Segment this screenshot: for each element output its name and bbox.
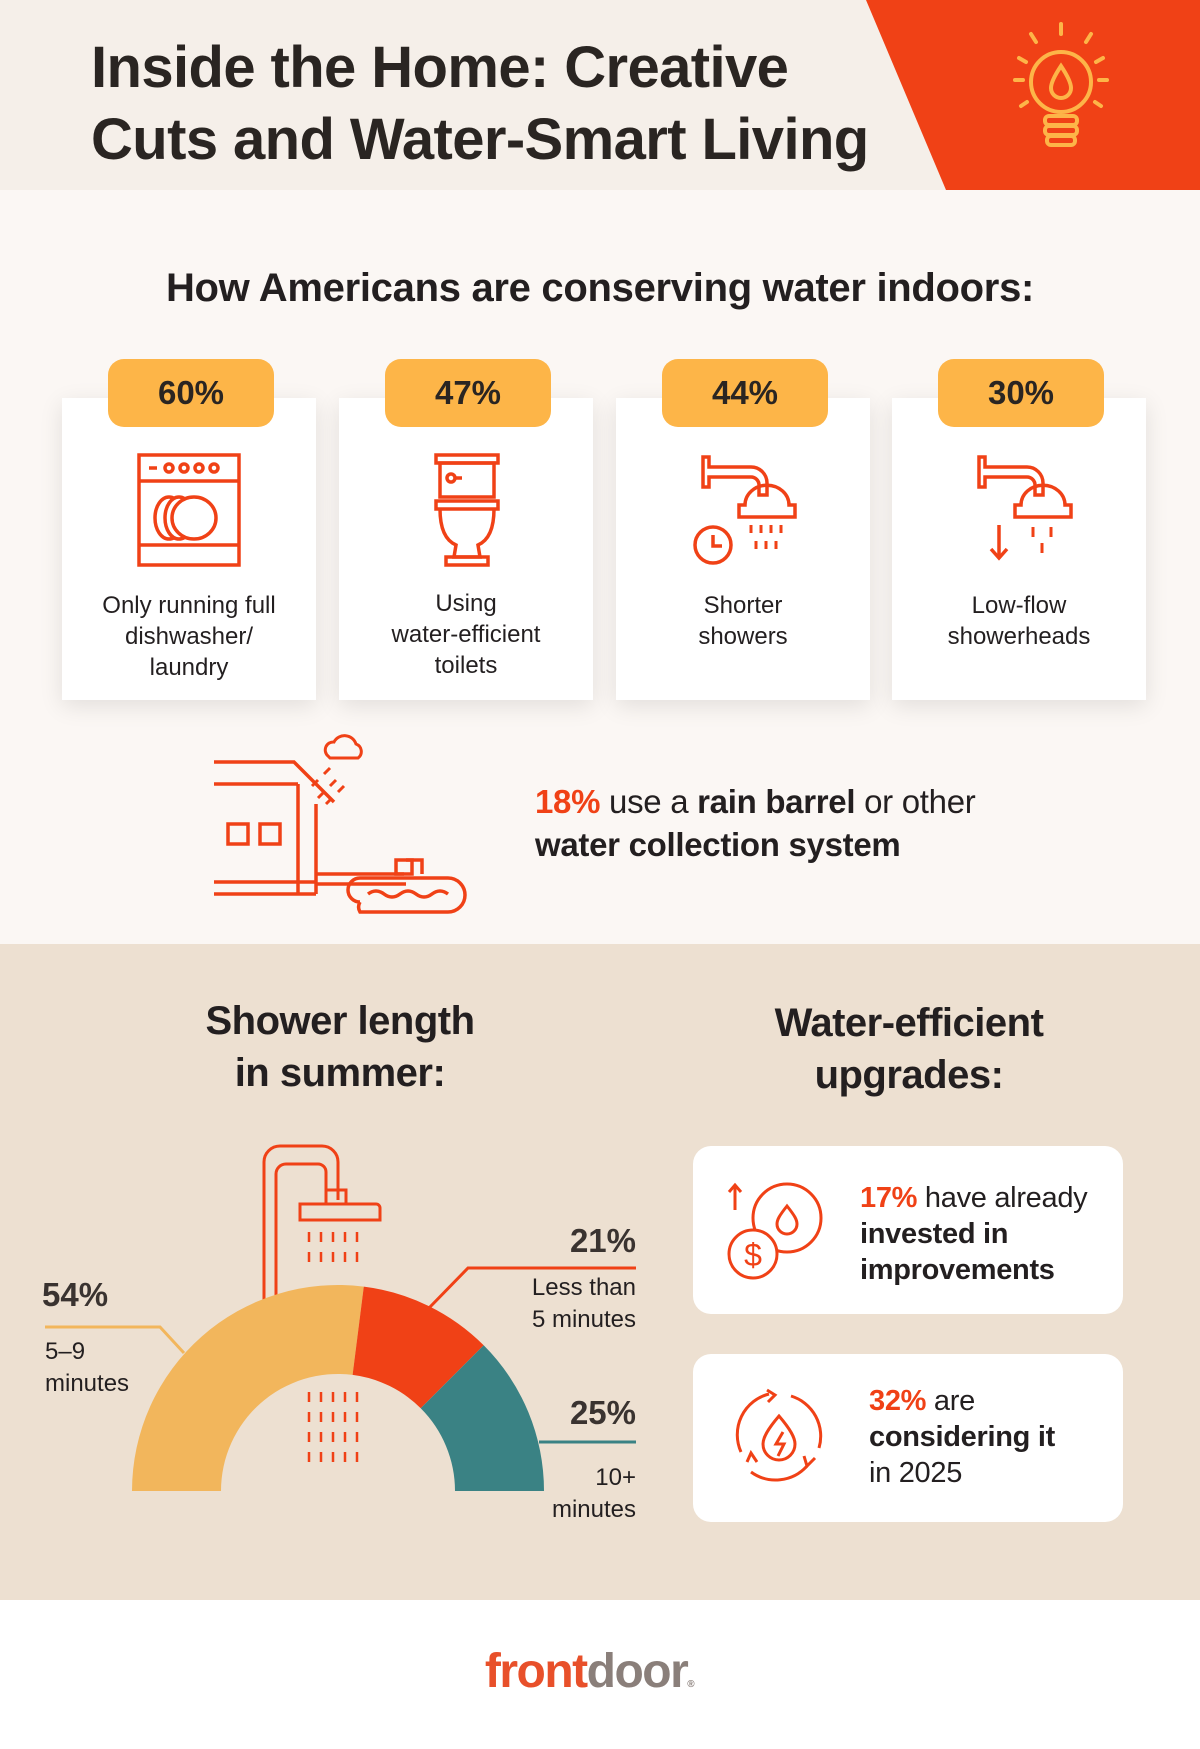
badge 44%: 44% (712, 374, 778, 411)
section: indoor conservation (0, 190, 1200, 944)
rain barrel stat text: 18% use a rain barrel or other (535, 783, 975, 820)
leader lines (45, 1327, 184, 1353)
label: water-efficient (392, 621, 540, 648)
label: laundry (150, 654, 228, 681)
label: showers (698, 623, 788, 650)
text (869, 1385, 1055, 1489)
text: 10+ (595, 1464, 636, 1491)
shower pipe icon (264, 1146, 380, 1300)
label (392, 590, 540, 679)
card: dishwasher (62, 398, 316, 700)
text: minutes (552, 1496, 636, 1523)
text: Less than (532, 1274, 636, 1301)
heading: shower length: in summer: (235, 1051, 445, 1095)
label: dishwasher/ (125, 623, 253, 650)
heading: upgrades (774, 1001, 1044, 1097)
label (102, 592, 276, 681)
red segment 21% (353, 1287, 484, 1408)
heading: upgrades: Water-efficient (775, 1001, 1043, 1045)
text: minutes (45, 1370, 129, 1397)
icon: low-flow showerhead (977, 455, 1073, 560)
title: Inside the Home: Creative (91, 35, 788, 100)
teal segment 25% (421, 1345, 544, 1491)
text: 5–9 (45, 1338, 85, 1365)
yellow segment 54% (132, 1285, 364, 1491)
label: Using (435, 590, 497, 617)
text: in 2025 (869, 1457, 962, 1489)
label: showerheads (948, 623, 1090, 650)
rain barrel stat text (534, 783, 976, 863)
text: considering it (869, 1421, 1055, 1453)
label: Only running full (102, 592, 276, 619)
subtitle: How Americans are conserving water indoors: (166, 266, 1034, 310)
badge 60%: 60% (158, 374, 224, 411)
badge 47% (385, 359, 551, 427)
card: toilets (339, 398, 593, 700)
icon: shower with clock (693, 455, 797, 565)
drops (309, 1232, 357, 1462)
heading: shower length (205, 999, 475, 1095)
icon: lightbulb (1013, 22, 1109, 147)
text: 5 minutes (532, 1306, 636, 1333)
title: Cuts and Water-Smart Living (91, 107, 869, 172)
text: 32% are (869, 1385, 975, 1417)
rain barrel stat text: water collection system (535, 826, 900, 863)
badge 30% (938, 359, 1104, 427)
badge 60% (108, 359, 274, 427)
text: invested in (860, 1218, 1008, 1250)
label: Shorter (704, 592, 782, 619)
icon: money and drop: $ (744, 1237, 762, 1273)
badge 30%: 30% (988, 374, 1054, 411)
card: low-flow (892, 398, 1146, 700)
text: 17% have already (860, 1182, 1087, 1214)
icon: toilet (434, 453, 500, 567)
label 25%: 25% (570, 1394, 636, 1431)
card: showers (616, 398, 870, 700)
label (698, 592, 788, 650)
chart: shower length semi-donut (45, 1144, 636, 1491)
icon: dishwasher (137, 453, 241, 567)
upgrade card: invested (693, 1146, 1123, 1314)
text (860, 1182, 1088, 1286)
icon: cycle drop (736, 1388, 822, 1482)
badge 47%: 47% (435, 374, 501, 411)
label (948, 592, 1090, 650)
heading: shower length: Shower length (205, 999, 475, 1043)
heading: upgrades: upgrades: (815, 1053, 1003, 1097)
upgrade card: considering (693, 1354, 1123, 1522)
label 54%: 54% (42, 1276, 108, 1313)
header band (0, 0, 1200, 190)
logo: frontdoor: frontdoor® (485, 1645, 693, 1698)
icon: house with rain barrel (214, 734, 467, 914)
label: toilets (435, 652, 497, 679)
section: beige (0, 944, 1200, 1600)
text: improvements (860, 1254, 1055, 1286)
header orange shape (866, 0, 1200, 190)
label 21%: 21% (570, 1222, 636, 1259)
label: Low-flow (972, 592, 1066, 619)
title (91, 35, 869, 172)
badge 44% (662, 359, 828, 427)
icon: money and drop (728, 1182, 822, 1280)
